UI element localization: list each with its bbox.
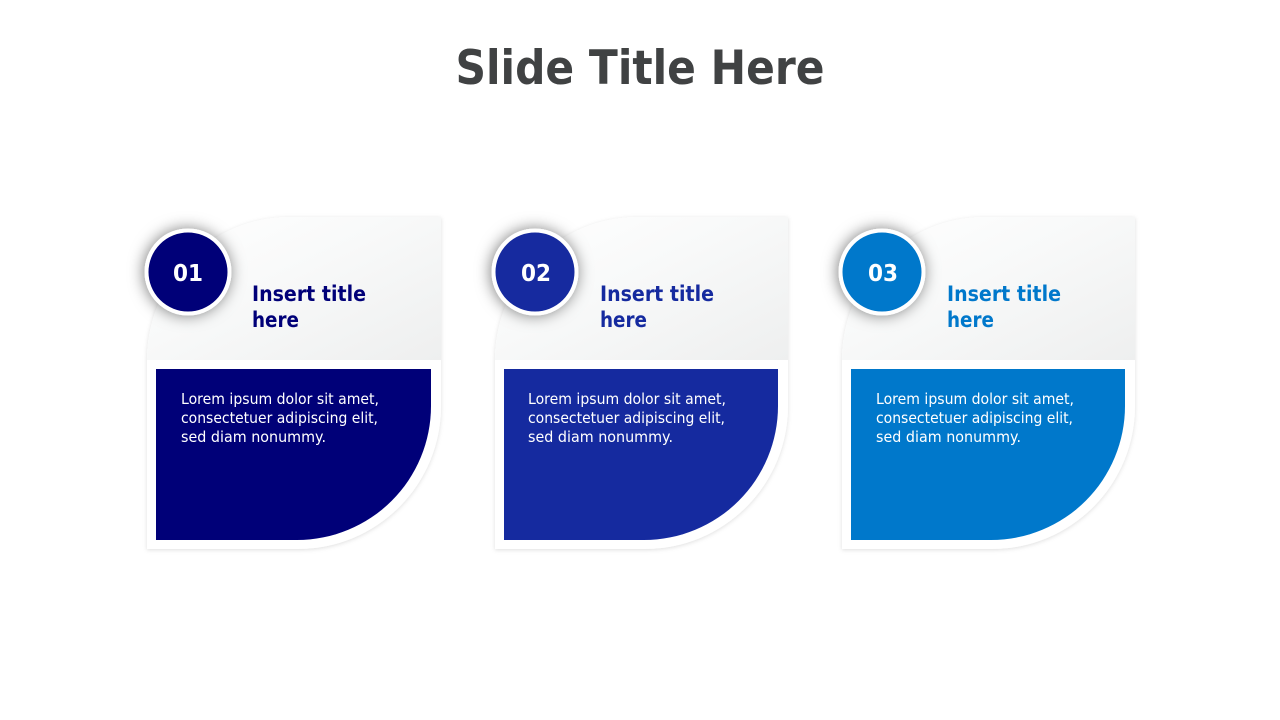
- card heading: Insert title: [600, 282, 714, 307]
- panel: card 03: [840, 217, 1135, 549]
- number badge: 02: [521, 261, 551, 287]
- panel: card 02: [494, 217, 788, 549]
- body text: sed diam nonummy.: [181, 428, 326, 446]
- number badge: 03: [868, 261, 898, 287]
- body text: consectetuer adipiscing elit,: [528, 409, 725, 427]
- card heading: [947, 282, 1061, 333]
- panel: card 01: [146, 217, 441, 549]
- body text: Lorem ipsum dolor sit amet,: [181, 390, 379, 408]
- card header gradient: [147, 217, 441, 360]
- card header gradient: [495, 217, 788, 360]
- number badge: 01: [173, 261, 203, 287]
- card background: [842, 217, 1135, 549]
- card heading: here: [600, 308, 647, 333]
- title: Slide Title Here: [456, 41, 824, 96]
- card heading: here: [252, 308, 299, 333]
- card heading: [600, 282, 714, 333]
- body panel: [156, 369, 431, 540]
- body text: [528, 390, 726, 446]
- body text: [181, 390, 379, 446]
- card heading: [252, 282, 366, 333]
- card heading: here: [947, 308, 994, 333]
- body text: Lorem ipsum dolor sit amet,: [876, 390, 1074, 408]
- card background: [147, 217, 441, 549]
- card heading: Insert title: [252, 282, 366, 307]
- body text: sed diam nonummy.: [876, 428, 1021, 446]
- number badge: [840, 230, 924, 314]
- number badge: [494, 230, 576, 314]
- card header gradient: [842, 217, 1135, 360]
- body text: [876, 390, 1074, 446]
- body panel: [851, 369, 1125, 540]
- body text: Lorem ipsum dolor sit amet,: [528, 390, 726, 408]
- number badge: [146, 230, 230, 314]
- body panel: [504, 369, 778, 540]
- card heading: Insert title: [947, 282, 1061, 307]
- body text: sed diam nonummy.: [528, 428, 673, 446]
- card background: [495, 217, 788, 549]
- body text: consectetuer adipiscing elit,: [181, 409, 378, 427]
- body text: consectetuer adipiscing elit,: [876, 409, 1073, 427]
